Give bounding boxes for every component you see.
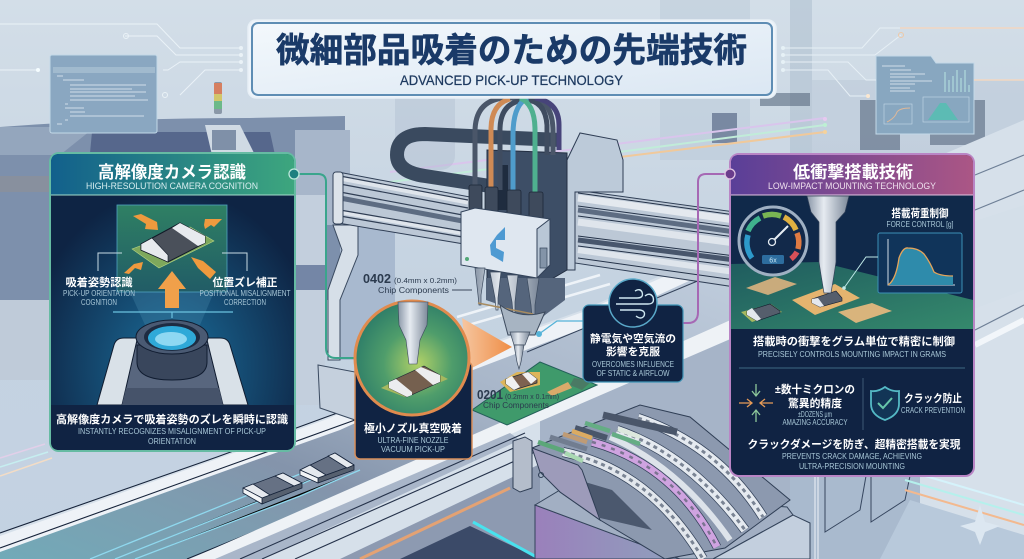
- callout: ultra-fine nozzle inset: VACUUM PICK-UP: [381, 445, 445, 454]
- panel: high-resolution camera: [50, 153, 299, 451]
- panel: low-impact mounting: FORCE CONTROL [g]: [886, 220, 954, 229]
- panel: low-impact mounting: [725, 154, 974, 476]
- callout: ultra-fine nozzle inset: [355, 301, 472, 459]
- icon: gauge: [739, 207, 807, 275]
- panel: high-resolution camera: PICK-UP ORIENTATION: [63, 289, 135, 298]
- panel: low-impact mounting: CRACK PREVENTION: [901, 406, 965, 415]
- label: 0201: Chip Components: [483, 401, 549, 410]
- label: 0402: [363, 271, 472, 295]
- description: impact: 搭載時の衝撃をグラム単位で精密に制御: [753, 334, 955, 348]
- panel: low-impact mounting: ULTRA-PRECISION MOUNTING: [799, 462, 905, 471]
- panel header: [731, 155, 973, 195]
- label: 0402: (0.4mm x 0.2mm): [394, 276, 458, 285]
- panel description: 高解像度カメラで吸着姿勢のズレを瞬時に認識: [56, 412, 288, 426]
- callout text: 極小ノズル真空吸着: [364, 421, 462, 435]
- icon: camera: [97, 320, 248, 405]
- icon: magnified chip: [381, 366, 448, 397]
- icon: conveyor chip components: [243, 453, 354, 504]
- up arrow: [158, 271, 186, 308]
- panel: high-resolution camera: COGNITION: [81, 298, 117, 307]
- panel header: [51, 154, 294, 195]
- callout text: 静電気や空気流の: [590, 332, 676, 345]
- callout: static and airflow: OVERCOMES INFLUENCE: [592, 360, 674, 369]
- bottom band: [51, 405, 294, 450]
- panel: high-resolution camera: INSTANTLY RECOGNIZES MISALIGNMENT OF PICK-UP: [78, 427, 266, 436]
- icon: wind: [609, 279, 657, 327]
- icon: accuracy arrows: [739, 384, 773, 422]
- heading english: LOW-IMPACT MOUNTING TECHNOLOGY: [768, 181, 936, 191]
- pick-up head with hoses and nozzles: [461, 98, 623, 369]
- text: crack prevention: クラック防止: [904, 391, 962, 405]
- callout: static and airflow: 影響を克服: [606, 345, 661, 358]
- connector dot: [289, 169, 299, 179]
- heading: 低衝撃搭載技術: [793, 163, 913, 182]
- label: 0201: 0201: [477, 387, 503, 402]
- conveyor belt: [0, 205, 1024, 559]
- gantry post and rails: [318, 172, 735, 420]
- main title: 微細部品吸着のための先端技術: [276, 32, 747, 70]
- description: ultra-precision: クラックダメージを防ぎ、超精密搭載を実現: [748, 437, 960, 451]
- label: 0201: [477, 387, 559, 410]
- magnified circle: [355, 301, 469, 415]
- force chart: [878, 233, 962, 293]
- cable chain: [397, 134, 560, 186]
- scan line: [113, 312, 233, 318]
- icon: magnified nozzle: [398, 302, 428, 364]
- heading: 高解像度カメラ認識: [98, 162, 246, 182]
- top-right dashboard window: [781, 28, 1024, 134]
- orange zoom beam: [462, 318, 512, 370]
- callout: static and airflow: [536, 279, 683, 382]
- board scene: [731, 196, 973, 329]
- label: 0402: Chip Components: [378, 286, 449, 295]
- callout: static and airflow: OF STATIC & AIRFLOW: [596, 369, 670, 378]
- icon: mounting nozzle: [807, 196, 849, 293]
- pcb board: [472, 362, 597, 425]
- panel: low-impact mounting: AMAZING ACCURACY: [782, 418, 848, 427]
- panel: high-resolution camera: ORIENTATION: [148, 437, 196, 446]
- panel: low-impact mounting: PREVENTS CRACK DAMAGE, ACHIEVING: [782, 452, 922, 461]
- label: 0201: (0.2mm x 0.1mm): [505, 394, 559, 401]
- icon: gauge: 6x: [769, 258, 777, 264]
- label: force control: 搭載荷重制御: [892, 206, 948, 220]
- connector: purple: [680, 174, 730, 323]
- panel: low-impact mounting: 驚異的精度: [788, 396, 842, 410]
- beam: [130, 292, 214, 325]
- text: accuracy: ±数十ミクロンの: [775, 382, 855, 396]
- panel: high-resolution camera: POSITIONAL MISALIGNMENT: [200, 289, 291, 298]
- icon: shield: [871, 387, 899, 420]
- label: pick-up orientation: 吸着姿勢認識: [66, 275, 132, 289]
- recognition frame: [117, 205, 227, 292]
- callout lines: [98, 253, 247, 271]
- panel: low-impact mounting: PRECISELY CONTROLS MOUNTING IMPACT IN GRAMS: [758, 350, 946, 359]
- tape feeder: [513, 405, 810, 559]
- label: 0402: 0402: [363, 271, 391, 286]
- panel: low-impact mounting: ±DOZENS μm: [798, 410, 832, 419]
- heading english: HIGH-RESOLUTION CAMERA COGNITION: [86, 181, 258, 191]
- title plate: [248, 20, 776, 98]
- connector dot: [725, 169, 735, 179]
- callout: ultra-fine nozzle inset: ULTRA-FINE NOZZLE: [378, 436, 448, 445]
- subtitle: ADVANCED PICK-UP TECHNOLOGY: [400, 72, 624, 88]
- connector: green: [296, 174, 356, 358]
- label: positional misalignment: 位置ズレ補正: [212, 275, 278, 289]
- top-left code window: [0, 24, 243, 133]
- panel: high-resolution camera: CORRECTION: [224, 298, 266, 307]
